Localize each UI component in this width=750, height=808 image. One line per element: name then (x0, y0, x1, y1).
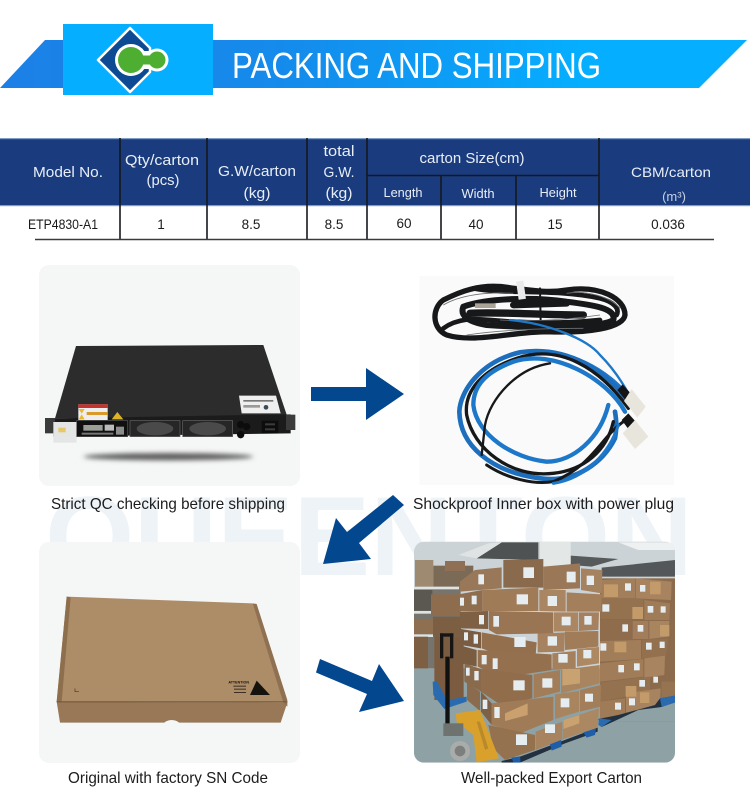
table header labels: Length (384, 185, 422, 200)
cables photo (432, 280, 648, 485)
specification table (0, 138, 750, 240)
table header labels: (kg) (326, 185, 352, 202)
carton photo: ATTENTION (228, 681, 249, 685)
table header labels: (pcs) (146, 172, 180, 189)
table data row: 15 (547, 217, 563, 232)
table data row: 8.5 (242, 217, 260, 232)
table header background (0, 138, 750, 206)
table grid lines (120, 138, 599, 240)
caption: Shockproof Inner box with power plug (413, 496, 674, 513)
banner ribbon (0, 40, 747, 88)
panel background (39, 265, 300, 486)
logo tile (63, 24, 213, 95)
table header labels: (kg) (244, 185, 270, 202)
table header labels (33, 143, 711, 204)
table header labels: carton Size(cm) (420, 150, 524, 167)
table data row: ETP4830-A1 (28, 217, 98, 232)
table data row: 60 (396, 216, 412, 231)
power unit photo (45, 345, 295, 460)
table header labels: G.W/carton (218, 163, 296, 180)
table header labels: G.W. (324, 164, 354, 181)
caption: Well-packed Export Carton (461, 770, 642, 787)
caption: Strict QC checking before shipping (51, 496, 285, 513)
table header labels: Height (540, 185, 577, 200)
table data row: 1 (157, 217, 165, 232)
caption: Original with factory SN Code (68, 770, 268, 787)
panel: inner carton (39, 542, 300, 787)
table header labels: CBM/carton (631, 164, 711, 180)
table data row (28, 216, 685, 232)
arrow: down-right (316, 659, 404, 712)
table header labels: Qty/carton (125, 152, 199, 169)
carton photo (57, 597, 287, 729)
arrow: down-left (323, 495, 404, 564)
table data row: 0.036 (651, 217, 685, 232)
table header labels: (m³) (662, 189, 686, 204)
panel: export cartons (414, 542, 675, 787)
panel: cables (413, 276, 674, 513)
banner (0, 24, 747, 95)
warehouse photo (414, 542, 675, 763)
table header labels: total (324, 143, 354, 160)
panel background (39, 542, 300, 763)
watermark text: QUEENTON (45, 474, 693, 599)
table data row: 40 (468, 217, 484, 232)
table header labels: Width (462, 186, 494, 201)
table header labels: Model No. (33, 164, 103, 181)
banner title: PACKING AND SHIPPING (232, 45, 601, 86)
panel: QC checked device (39, 265, 300, 513)
arrow: right (311, 368, 404, 420)
table data row: 8.5 (325, 217, 343, 232)
